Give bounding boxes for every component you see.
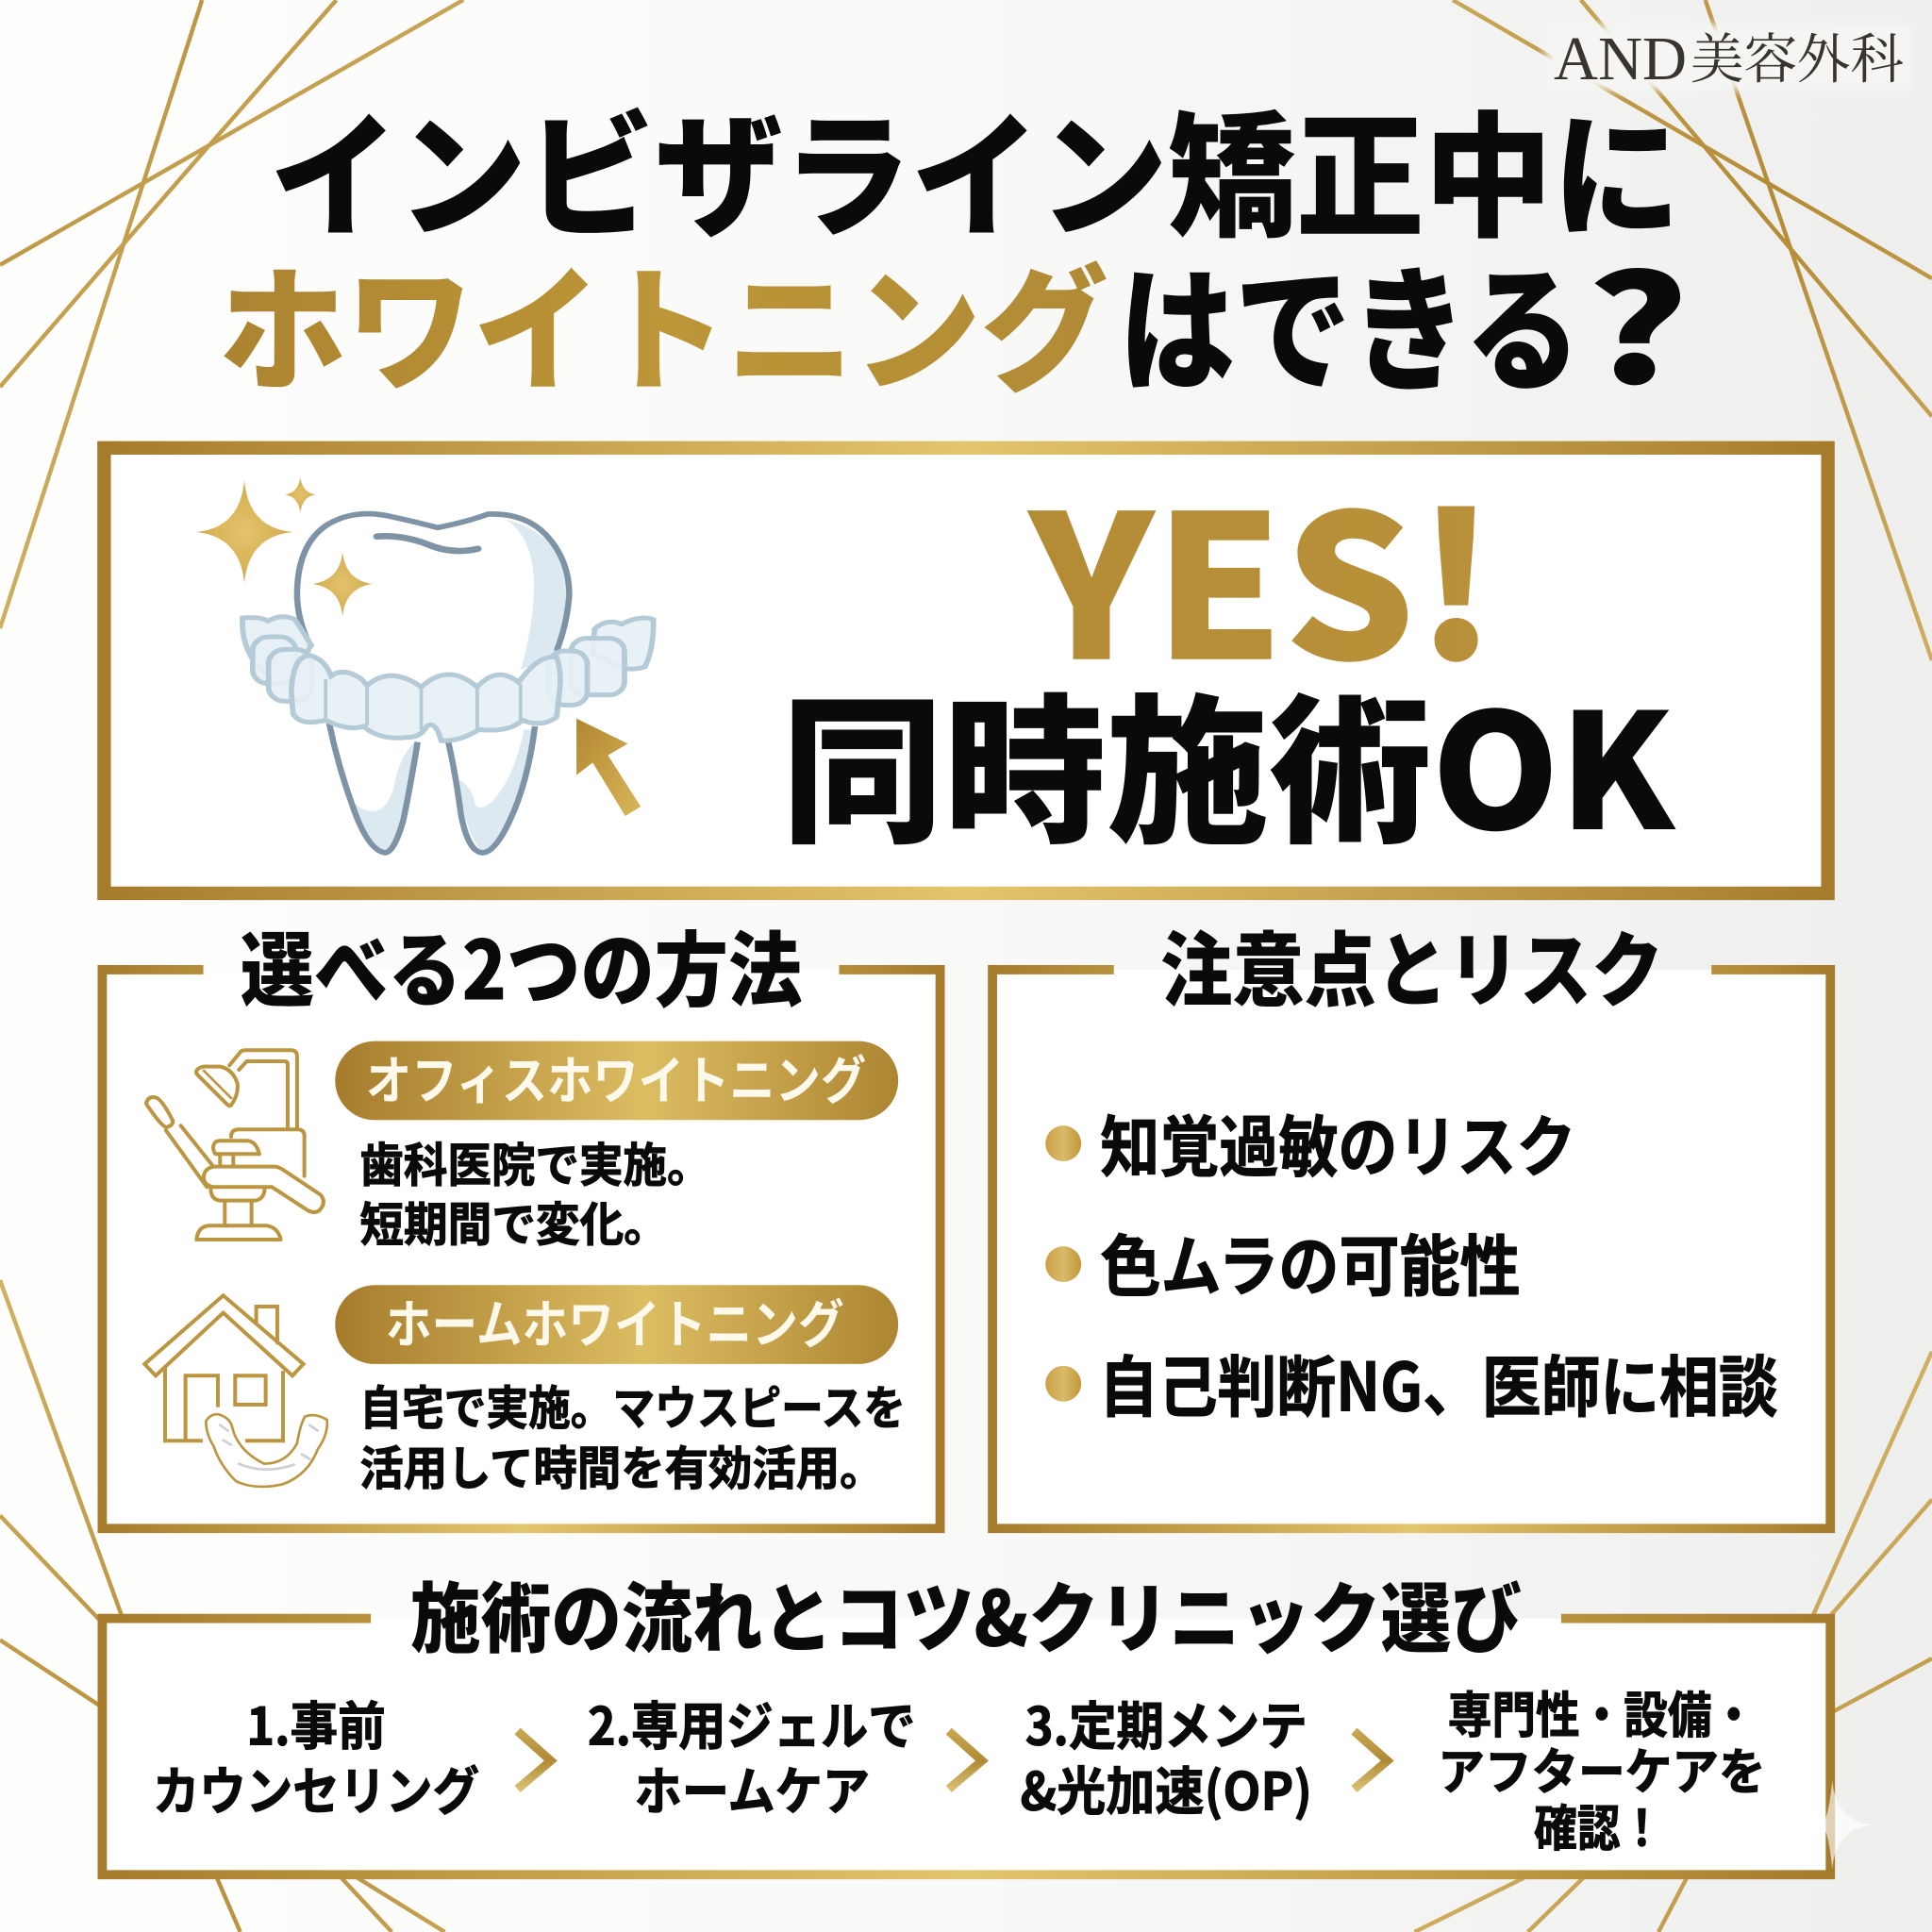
icon: tooth with aligner, sparkles and arrow bbox=[195, 477, 654, 853]
step 2: 2.専用ジェルで bbox=[588, 1684, 915, 1759]
title: ホワイトニング bbox=[219, 223, 1108, 419]
icon: faint white sparkle bbox=[1821, 1780, 1873, 1869]
text: home description: 活用して時間を有効活用。 bbox=[359, 1431, 883, 1499]
text: office description bbox=[359, 1128, 711, 1255]
pill: オフィスホワイトニング: オフィスホワイトニング bbox=[366, 1039, 866, 1114]
icon: dental chair bbox=[146, 1050, 324, 1240]
logo: AND美容外科: AND bbox=[1554, 25, 1687, 93]
step 3 bbox=[1020, 1684, 1312, 1825]
step 2 bbox=[588, 1684, 915, 1825]
step 1: カウンセリング bbox=[153, 1750, 479, 1825]
panel: 2 methods bbox=[102, 905, 941, 1528]
arrow: step 1 to 2 bbox=[518, 1731, 551, 1789]
icon: large sparkle bbox=[195, 480, 293, 583]
logo: AND美容外科 bbox=[1546, 16, 1912, 93]
YES heading: YES! bbox=[1027, 428, 1497, 717]
text: home description: 自宅で実施。マウスピースを bbox=[359, 1371, 906, 1439]
step 2: ホームケア bbox=[635, 1750, 870, 1825]
text: office description: 短期間で変化。 bbox=[359, 1187, 668, 1255]
step 1 bbox=[153, 1684, 479, 1825]
panel: cautions and risks bbox=[992, 905, 1830, 1528]
arrow: step 2 to 3 bbox=[949, 1731, 982, 1789]
title: はできる bbox=[1119, 223, 1581, 419]
bullet: 知覚過敏のリスク: 知覚過敏のリスク bbox=[1100, 1094, 1576, 1191]
panel: YES answer bbox=[104, 428, 1828, 893]
panel: flow, tips and clinic selection bbox=[102, 1558, 1873, 1874]
同時施術OK heading: 同時施術OK bbox=[781, 643, 1676, 875]
icon: gold arrow bbox=[576, 719, 641, 816]
clinic check note: 確認！ bbox=[1534, 1790, 1663, 1861]
bullet: 色ムラの可能性: 色ムラの可能性 bbox=[1100, 1214, 1521, 1310]
pill: ホームホワイトニング: ホームホワイトニング bbox=[386, 1283, 844, 1358]
icon: house with aligner bbox=[144, 1295, 327, 1487]
step 3: &光加速(OP) bbox=[1020, 1750, 1312, 1825]
text: home description bbox=[359, 1371, 906, 1499]
logo: AND美容外科: 美容外科 bbox=[1690, 16, 1904, 93]
arrow: step 3 to clinic check bbox=[1354, 1731, 1388, 1789]
heading: 選べる2つの方法: 選べる2つの方法 bbox=[241, 905, 802, 1023]
step 3: 3.定期メンテ bbox=[1025, 1684, 1307, 1759]
heading: 施術の流れとコツ&クリニック選び: 施術の流れとコツ&クリニック選び bbox=[410, 1558, 1522, 1669]
title bbox=[219, 69, 1690, 426]
clinic check note: 専門性・設備・ bbox=[1448, 1675, 1756, 1747]
icon: small sparkle bbox=[285, 477, 315, 512]
title: ? bbox=[1586, 212, 1690, 426]
text: office description: 歯科医院で実施。 bbox=[359, 1128, 711, 1196]
step 1: 1.事前 bbox=[246, 1684, 386, 1759]
bullet: 自己判断NG、医師に相談: 自己判断NG、医師に相談 bbox=[1099, 1335, 1778, 1431]
icon: medium sparkle bbox=[312, 552, 373, 616]
title: インビザライン矯正中に bbox=[270, 69, 1681, 265]
clinic check note bbox=[1438, 1675, 1766, 1861]
heading: 注意点とリスク: 注意点とリスク bbox=[1160, 905, 1663, 1023]
clinic check note: アフターケアを bbox=[1438, 1732, 1766, 1804]
